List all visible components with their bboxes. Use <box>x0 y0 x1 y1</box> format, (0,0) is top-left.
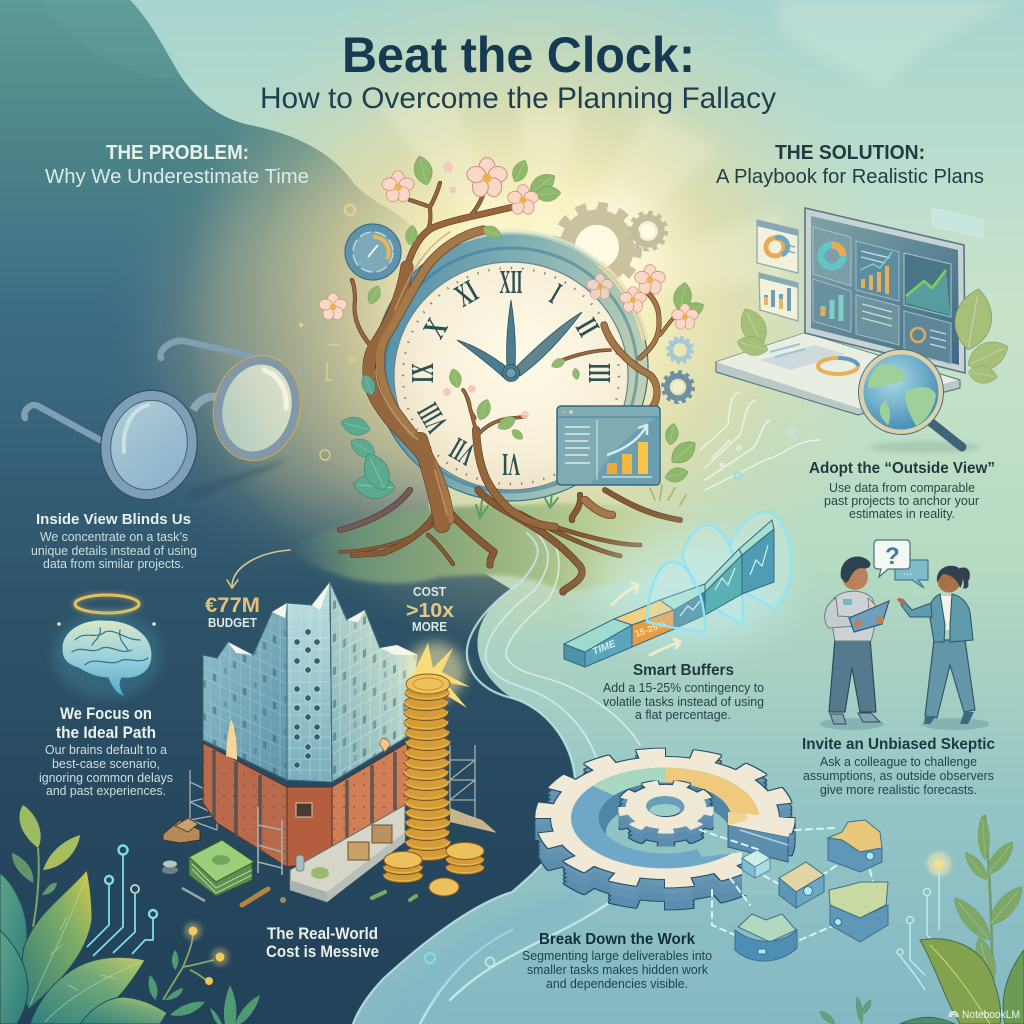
gear cut gap <box>693 825 800 895</box>
buffer arrows <box>612 583 680 655</box>
clock numerals: X <box>415 312 455 344</box>
clock numerals: IX <box>404 363 440 383</box>
callout: smart buffers: a flat percentage. <box>635 708 731 722</box>
circuit nodes <box>897 870 945 990</box>
gears behind clock <box>557 207 693 402</box>
chart window <box>557 406 660 485</box>
gold piece <box>828 820 882 872</box>
callout: adopt the outside view: estimates in reality. <box>849 507 955 521</box>
callout: break down the work: and dependencies visible. <box>546 977 688 991</box>
callout: inside view: unique details instead of using <box>31 544 197 558</box>
callout: adopt the outside view: Adopt the “Outside View” <box>809 460 995 477</box>
callout: unbiased skeptic: assumptions, as outside observers <box>803 769 994 783</box>
label: cost overrun: >10x <box>406 600 454 622</box>
hill under tree <box>290 504 720 590</box>
heading: the problem: Why We Underestimate Time <box>45 166 309 188</box>
icon: brain with halo <box>53 595 161 699</box>
callout: real-world cost: The Real-World <box>267 925 378 943</box>
label: budget: €77M <box>205 594 260 617</box>
concert hall building <box>162 582 497 905</box>
roof highlights <box>228 582 418 655</box>
callout: ideal path <box>39 705 173 798</box>
buffer back arcs <box>682 512 791 624</box>
callout: break down the work <box>522 931 712 991</box>
clock numerals: XI <box>448 272 484 314</box>
icon: glasses <box>24 341 312 509</box>
large gear <box>545 754 800 904</box>
right piece <box>829 882 888 942</box>
callout: ideal path: ignoring common delays <box>39 771 173 785</box>
callout: break down the work: Segmenting large deliverables into <box>522 949 712 963</box>
burst <box>405 642 470 708</box>
label: cost overrun <box>406 584 454 634</box>
grass tufts <box>442 485 686 528</box>
icon: magnifying glass <box>858 350 980 453</box>
clock numerals: II <box>569 312 607 342</box>
glass upper <box>203 582 418 782</box>
clock numerals: VII <box>443 431 481 473</box>
river of light <box>353 533 640 1024</box>
heading: the solution <box>716 142 984 188</box>
callout: smart buffers <box>603 662 764 722</box>
circuit lines <box>700 392 820 490</box>
gear coloured ring <box>552 758 778 878</box>
smart buffers graphic: TIME <box>591 638 618 658</box>
arrow to budget <box>227 550 290 588</box>
callout: ideal path: We Focus on <box>60 705 152 723</box>
floating panels <box>757 208 983 321</box>
callout: inside view: Inside View Blinds Us <box>36 511 191 528</box>
task fragments <box>700 820 888 961</box>
smart buffers graphic: 15-25% <box>633 619 667 639</box>
laptop screen <box>805 208 965 373</box>
clock numerals: I <box>544 276 568 310</box>
callout: inside view: data from similar projects. <box>43 557 184 571</box>
heading: the solution: A Playbook for Realistic Plans <box>716 166 984 188</box>
heading: the problem: THE PROBLEM: <box>106 142 249 164</box>
callout: adopt the outside view: past projects to anchor your <box>824 494 979 508</box>
clock numerals: III <box>582 363 618 383</box>
scaffold front <box>258 807 282 875</box>
speech bubbles: ? <box>885 543 900 570</box>
icon: speed gauge <box>345 224 401 280</box>
heading: the solution: THE SOLUTION: <box>775 142 925 164</box>
heading: the problem <box>45 142 309 188</box>
callout: break down the work: smaller tasks makes hidden work <box>527 963 709 977</box>
logo: NotebookLM: NotebookLM <box>962 1009 1020 1021</box>
dashed connectors <box>700 828 875 940</box>
porthole windows <box>294 629 320 768</box>
title <box>260 27 776 115</box>
label: budget <box>205 594 260 630</box>
speech bubbles: ... <box>903 568 913 577</box>
man <box>825 556 889 724</box>
bottom piece <box>735 914 797 961</box>
small cube <box>742 850 770 878</box>
foliage: bottom right <box>817 815 1024 1024</box>
brick base <box>203 743 412 867</box>
tree <box>340 183 686 592</box>
callout: ideal path: Our brains default to a <box>45 743 167 757</box>
platform <box>290 805 405 902</box>
speech bubbles <box>874 540 928 588</box>
gear top face <box>545 754 785 882</box>
foliage: bottom left <box>0 805 260 1024</box>
callout: smart buffers: volatile tasks instead of using <box>603 695 764 709</box>
title: How to Overcome the Planning Fallacy <box>260 82 776 115</box>
label: cost overrun: MORE <box>412 619 447 634</box>
cash stack <box>189 840 254 896</box>
building site materials <box>162 860 416 905</box>
clock numerals: VIII <box>410 397 454 439</box>
callout: adopt the outside view <box>809 460 995 521</box>
clock numerals: VI <box>502 447 520 483</box>
laptop base <box>716 333 960 415</box>
people: unbiased skeptic <box>820 540 989 730</box>
callout: real-world cost <box>266 925 379 961</box>
smart buffers graphic <box>564 512 791 667</box>
plants by laptop <box>734 286 1013 386</box>
callout: break down the work: Break Down the Work <box>539 931 695 948</box>
buffer front arc <box>647 562 705 632</box>
big leaves <box>0 870 167 1024</box>
callout: smart buffers: Add a 15-25% contingency to <box>603 681 764 695</box>
middle cube <box>779 862 824 908</box>
callout: real-world cost: Cost is Messive <box>266 943 379 961</box>
time bar <box>564 520 774 667</box>
callout: smart buffers: Smart Buffers <box>633 662 734 679</box>
woman <box>897 566 975 724</box>
callout: unbiased skeptic: Ask a colleague to challenge <box>820 755 977 769</box>
callout: unbiased skeptic: give more realistic forecasts. <box>820 783 977 797</box>
clock numerals <box>404 264 618 483</box>
clock numerals: XII <box>500 264 522 301</box>
callout: ideal path: the Ideal Path <box>56 724 156 742</box>
coin tower <box>404 674 450 860</box>
laptop dashboard <box>700 208 1013 490</box>
callout: ideal path: best-case scenario, <box>52 757 160 771</box>
blossoms and leaves <box>319 154 707 500</box>
scaffolding <box>190 745 475 830</box>
tree trunks <box>352 183 680 527</box>
glowing sprig <box>163 935 214 1000</box>
gear side wall <box>545 760 785 904</box>
callout: inside view: We concentrate on a task’s <box>40 530 188 544</box>
sparkles near tree <box>299 205 355 460</box>
title: Beat the Clock: <box>342 27 695 83</box>
sprig <box>12 805 80 927</box>
tree roots <box>340 490 680 592</box>
callout: inside view <box>31 511 197 571</box>
label: cost overrun: COST <box>413 584 446 599</box>
center gear <box>623 784 709 843</box>
rubble and boxes <box>163 808 497 843</box>
callout: ideal path: and past experiences. <box>46 784 166 798</box>
clock <box>374 232 648 501</box>
callout: unbiased skeptic: Invite an Unbiased Skeptic <box>802 736 995 753</box>
loose coins <box>384 842 484 896</box>
circuit nodes <box>87 846 157 956</box>
callout: unbiased skeptic <box>802 736 995 797</box>
callout: adopt the outside view: Use data from comparable <box>829 481 975 495</box>
clock hands <box>457 300 582 382</box>
label: budget: BUDGET <box>208 615 257 630</box>
